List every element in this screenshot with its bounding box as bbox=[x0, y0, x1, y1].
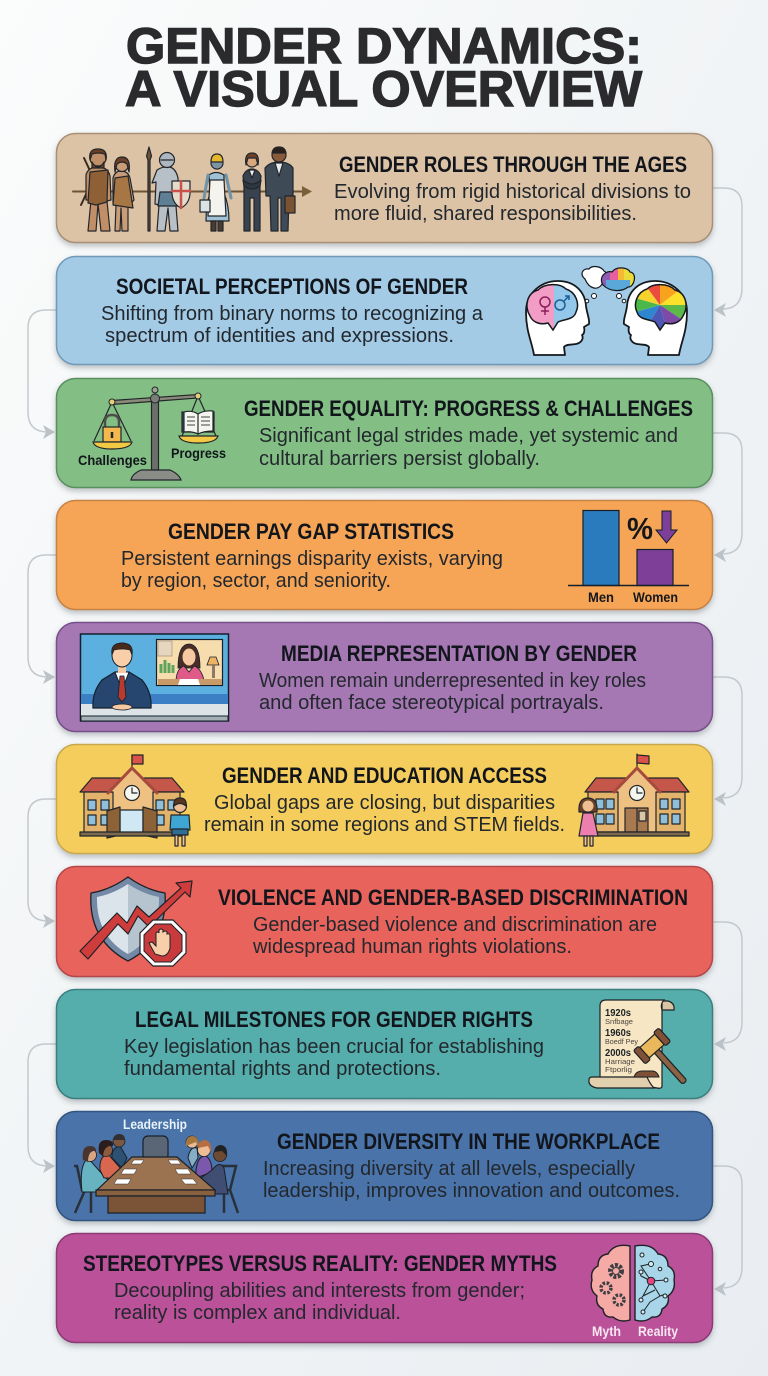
icon: shield, arrow and stop sign bbox=[80, 877, 192, 966]
heading: STEREOTYPES VERSUS REALITY: GENDER MYTHS bbox=[83, 1251, 557, 1276]
arrow: connector 6 to 7 bbox=[28, 799, 56, 928]
heading: GENDER DIVERSITY IN THE WORKPLACE bbox=[277, 1129, 660, 1154]
panel: media representation bbox=[56, 622, 712, 732]
description bbox=[259, 670, 646, 714]
icon: school with girl bbox=[579, 754, 689, 846]
icon: timeline of gender roles bbox=[73, 147, 312, 231]
icon: scroll and gavel: Boedf Pey bbox=[605, 1037, 638, 1046]
panel: gender diversity in the workplace bbox=[56, 1112, 712, 1220]
icon: scroll and gavel: 1960s bbox=[605, 1028, 631, 1039]
heading: VIOLENCE AND GENDER-BASED DISCRIMINATION bbox=[218, 885, 688, 910]
chart: pay gap bars: Women bbox=[633, 589, 678, 605]
title: GENDER DYNAMICS: bbox=[126, 18, 642, 74]
description bbox=[114, 1280, 525, 1324]
heading: MEDIA REPRESENTATION BY GENDER bbox=[281, 641, 637, 666]
description: Increasing diversity at all levels, especially bbox=[263, 1158, 635, 1180]
icon: boardroom leadership table: Leadership bbox=[123, 1116, 187, 1132]
icon: myth and reality brain bbox=[591, 1245, 678, 1339]
arrow: connector 9 to 10 bbox=[713, 1166, 742, 1296]
chart: pay gap bars: Men bbox=[588, 589, 614, 605]
chart: pay gap bars: % bbox=[627, 511, 653, 546]
description bbox=[101, 303, 484, 347]
title bbox=[125, 18, 643, 117]
icon: two heads with brains and thought clouds bbox=[525, 265, 695, 355]
icon: myth and reality brain: Myth bbox=[592, 1323, 621, 1339]
description: Gender-based violence and discrimination are bbox=[253, 914, 657, 936]
description: widespread human rights violations. bbox=[252, 936, 572, 958]
panel: legal milestones bbox=[56, 990, 712, 1098]
panel: gender and education access bbox=[56, 744, 712, 854]
icon: balance scale: Progress bbox=[171, 445, 226, 461]
icon: scroll and gavel: Snfbage bbox=[605, 1017, 633, 1026]
icon: scroll and gavel: 1920s bbox=[605, 1008, 631, 1019]
panel: violence and gender-based discrimination bbox=[56, 866, 712, 976]
description: Evolving from rigid historical divisions to bbox=[334, 181, 691, 203]
description: Shifting from binary norms to recognizing a bbox=[101, 303, 484, 325]
icon: scroll and gavel bbox=[589, 1000, 697, 1094]
description bbox=[121, 548, 503, 592]
description: reality is complex and individual. bbox=[114, 1302, 401, 1324]
description: Significant legal strides made, yet systemic and bbox=[259, 425, 678, 447]
heading: GENDER AND EDUCATION ACCESS bbox=[222, 763, 547, 788]
panel: gender roles through the ages bbox=[56, 134, 712, 242]
arrow: connector 4 to 5 bbox=[28, 555, 56, 684]
description: Persistent earnings disparity exists, varying bbox=[121, 548, 503, 570]
icon: scroll and gavel: Harriage bbox=[605, 1057, 635, 1066]
icon: news broadcast bbox=[80, 634, 228, 721]
description bbox=[252, 914, 657, 958]
description: Key legislation has been crucial for establishing bbox=[124, 1036, 544, 1058]
chart: pay gap bars bbox=[568, 510, 689, 605]
description: leadership, improves innovation and outcomes. bbox=[263, 1180, 680, 1202]
arrow: connector 1 to 2 bbox=[713, 188, 742, 317]
arrow: connector 5 to 6 bbox=[713, 677, 742, 806]
arrow: connector 3 to 4 bbox=[713, 433, 742, 562]
description: and often face stereotypical portrayals. bbox=[259, 692, 604, 714]
panel: societal perceptions of gender bbox=[56, 256, 712, 364]
arrow: connector 8 to 9 bbox=[28, 1044, 56, 1173]
heading: GENDER EQUALITY: PROGRESS & CHALLENGES bbox=[244, 396, 693, 421]
icon: balance scale: Challenges bbox=[78, 452, 147, 468]
icon: school with boy bbox=[80, 755, 190, 846]
description: by region, sector, and seniority. bbox=[121, 570, 391, 592]
icon: scroll and gavel: 2000s bbox=[605, 1048, 631, 1059]
heading: LEGAL MILESTONES FOR GENDER RIGHTS bbox=[135, 1007, 533, 1032]
description: more fluid, shared responsibilities. bbox=[334, 203, 637, 225]
description bbox=[204, 792, 565, 836]
description: cultural barriers persist globally. bbox=[259, 448, 540, 470]
arrow: connector 2 to 3 bbox=[28, 310, 56, 439]
description bbox=[334, 181, 691, 225]
icon: boardroom leadership table bbox=[74, 1116, 238, 1213]
panel: stereotypes versus reality bbox=[56, 1234, 712, 1342]
title: A VISUAL OVERVIEW bbox=[125, 61, 643, 117]
heading: GENDER PAY GAP STATISTICS bbox=[168, 519, 454, 544]
description bbox=[263, 1158, 680, 1202]
description bbox=[259, 425, 678, 470]
description: remain in some regions and STEM fields. bbox=[204, 814, 565, 836]
panel: gender equality bbox=[56, 378, 712, 488]
description: Women remain underrepresented in key roles bbox=[259, 670, 646, 692]
description: fundamental rights and protections. bbox=[124, 1058, 441, 1080]
icon: scroll and gavel: Ftporlig bbox=[605, 1065, 632, 1074]
description: spectrum of identities and expressions. bbox=[105, 325, 454, 347]
description: Decoupling abilities and interests from gender; bbox=[114, 1280, 525, 1302]
description: Global gaps are closing, but disparities bbox=[214, 792, 555, 814]
heading: SOCIETAL PERCEPTIONS OF GENDER bbox=[116, 274, 468, 299]
panel: gender pay gap statistics bbox=[56, 500, 712, 610]
icon: myth and reality brain: Reality bbox=[638, 1323, 678, 1339]
description bbox=[124, 1036, 544, 1080]
arrow: connector 7 to 8 bbox=[713, 922, 742, 1051]
heading: GENDER ROLES THROUGH THE AGES bbox=[339, 152, 687, 177]
icon: balance scale bbox=[78, 387, 226, 480]
